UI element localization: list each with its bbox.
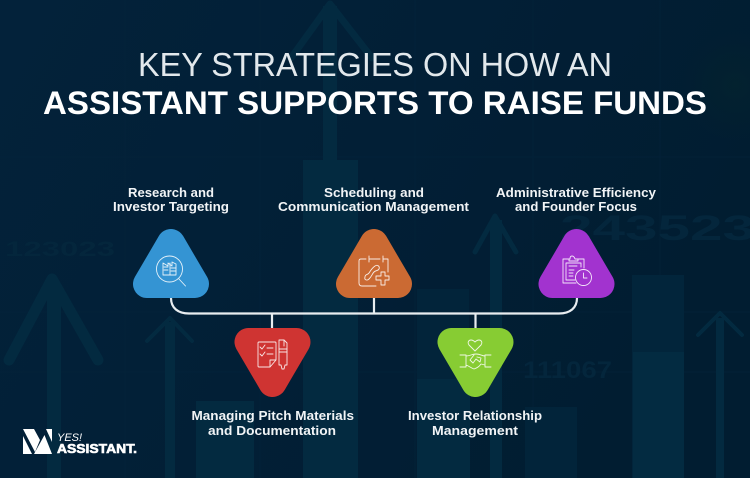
label: administrative: Administrative Efficiency [496,186,656,200]
item: managing pitch materials and documentation [192,340,354,438]
badge: red triangle [248,342,296,383]
connector lines [171,298,577,329]
label: administrative: and Founder Focus [515,200,637,214]
label: research: Research and [128,186,214,200]
icon: checklist and pen [258,340,287,369]
label: research [113,186,229,214]
label: scheduling [278,186,470,214]
badge: orange triangle [350,243,398,284]
label: managing: Managing Pitch Materials [192,409,354,423]
item: administrative efficiency and founder focus [496,186,656,286]
item: research and investor targeting [113,186,229,286]
background numbers: 111067 [523,357,612,384]
item: scheduling and communication management [278,186,470,286]
label: investor relationship: Management [432,424,519,438]
label: research: Investor Targeting [113,200,229,214]
icon: magnifier over documents [156,256,186,286]
logo [23,429,137,456]
logo wordmark: ASSISTANT. [57,442,137,456]
label: administrative [496,186,656,214]
title [43,47,707,121]
background numbers [5,209,750,384]
background numbers: 123023 [5,238,115,261]
item: investor relationship management [408,340,542,438]
label: managing: and Documentation [208,424,336,438]
label: investor relationship: Investor Relationship [408,409,542,423]
logo mark [23,429,52,454]
logo wordmark: YES! [57,432,82,444]
title: ASSISTANT SUPPORTS TO RAISE FUNDS [43,85,707,121]
logo wordmark [57,432,137,456]
label: managing [192,409,354,438]
label: scheduling: Scheduling and [324,186,424,200]
badge: blue triangle [147,243,195,284]
label: scheduling: Communication Management [278,200,470,214]
title: KEY STRATEGIES ON HOW AN [138,47,612,84]
badge: purple triangle [552,243,600,284]
label: investor relationship [408,409,542,438]
badge: green triangle [452,342,500,383]
background bars [196,160,684,478]
icon: clipboard with clock [563,256,592,286]
icon: calendar with phone and plus [359,256,389,286]
background numbers: 243523 [560,209,750,248]
icon: handshake with heart [460,340,491,369]
